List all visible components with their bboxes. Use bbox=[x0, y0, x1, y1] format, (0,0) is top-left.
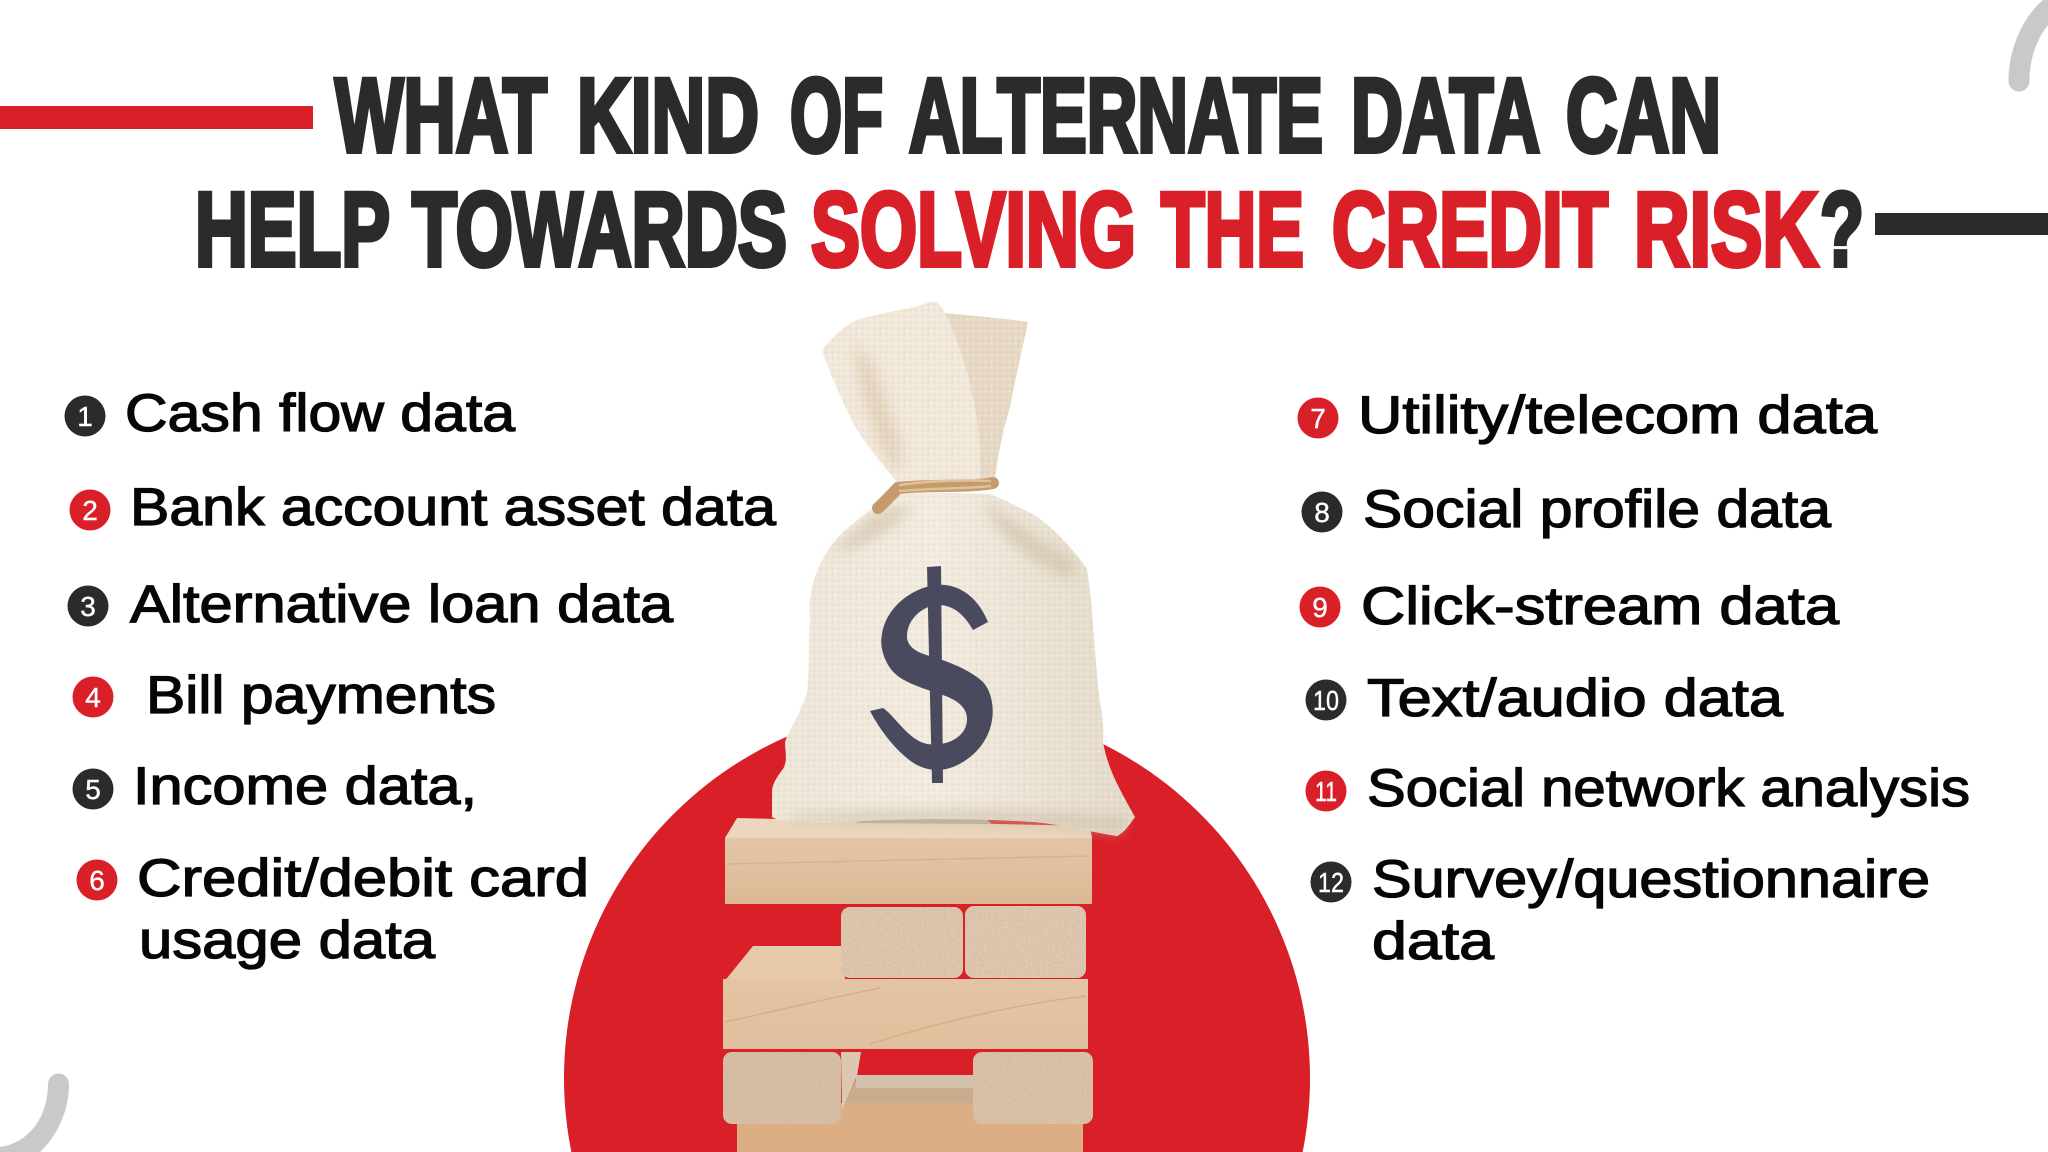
bag folds bbox=[790, 500, 1130, 834]
right list bbox=[1298, 386, 1970, 971]
title bbox=[195, 58, 1864, 288]
title line 1: KIND bbox=[577, 58, 759, 174]
title line 2: ? bbox=[1820, 172, 1864, 288]
rope tie bbox=[878, 480, 993, 508]
second row blocks bbox=[841, 906, 1086, 978]
bottom plank bbox=[737, 1075, 1083, 1152]
item 6: Credit/debit card bbox=[137, 849, 589, 908]
knot right flap bbox=[945, 313, 1028, 478]
item 10: 10 bbox=[1313, 685, 1339, 716]
title line 1 bbox=[335, 58, 1721, 174]
left list bbox=[64, 384, 777, 970]
title line 2: TOWARDS bbox=[412, 172, 787, 288]
decorative arc: top right bbox=[2008, 0, 2048, 92]
title line 1: DATA bbox=[1351, 58, 1540, 174]
title line 2: CREDIT bbox=[1332, 172, 1608, 288]
item 9: 9 bbox=[1312, 592, 1328, 623]
item 12: Survey/questionnaire bbox=[1372, 850, 1930, 909]
top plank bbox=[725, 818, 1092, 904]
item 12: data bbox=[1372, 912, 1495, 971]
title line 2: RISK bbox=[1634, 172, 1818, 288]
item 8: Social profile data bbox=[1363, 480, 1832, 539]
knot shadow bbox=[855, 345, 902, 470]
title accent bar: dark bbox=[1875, 213, 2048, 235]
item 6: usage data bbox=[139, 911, 436, 970]
title line 1: CAN bbox=[1566, 58, 1721, 174]
item 3: Alternative loan data bbox=[130, 575, 674, 634]
decorative arc: bottom left bbox=[0, 1074, 69, 1152]
item 1: 1 bbox=[77, 401, 93, 432]
illustration: wooden block tower bbox=[723, 818, 1093, 1152]
item 6 bbox=[76, 849, 589, 970]
item 11: Social network analysis bbox=[1367, 759, 1970, 818]
item 11: 11 bbox=[1315, 776, 1337, 807]
dollar sign bbox=[870, 566, 993, 783]
item 5: 5 bbox=[85, 774, 101, 805]
bag neck and knot bbox=[822, 302, 1028, 487]
third row left block bbox=[723, 1052, 861, 1124]
knot weave texture bbox=[822, 302, 1028, 487]
item 4: 4 bbox=[85, 682, 101, 713]
title line 2: THE bbox=[1161, 172, 1304, 288]
item 9: Click-stream data bbox=[1361, 577, 1840, 636]
third row right block bbox=[973, 1052, 1093, 1124]
item 2: Bank account asset data bbox=[130, 478, 777, 537]
bag weave texture bbox=[772, 491, 1135, 836]
illustration: money bag bbox=[772, 302, 1135, 836]
title line 1: ALTERNATE bbox=[909, 58, 1323, 174]
title line 2 bbox=[195, 172, 1864, 288]
item 6: 6 bbox=[89, 865, 105, 896]
title accent bar: red bbox=[0, 106, 313, 129]
item 4: Bill payments bbox=[146, 666, 496, 725]
title line 2: SOLVING bbox=[811, 172, 1136, 288]
item 5: Income data, bbox=[133, 757, 477, 816]
item 7: 7 bbox=[1310, 403, 1326, 434]
item 2: 2 bbox=[82, 495, 98, 526]
title line 1: OF bbox=[790, 58, 883, 174]
item 10: Text/audio data bbox=[1367, 669, 1784, 728]
item 8: 8 bbox=[1314, 497, 1330, 528]
title line 1: WHAT bbox=[335, 58, 547, 174]
bag body bbox=[772, 491, 1135, 836]
second plank bbox=[723, 946, 1088, 1049]
item 7: Utility/telecom data bbox=[1358, 386, 1878, 445]
item 12: 12 bbox=[1318, 867, 1344, 898]
item 12 bbox=[1310, 850, 1930, 971]
title line 2: HELP bbox=[195, 172, 390, 288]
item 3: 3 bbox=[80, 591, 96, 622]
red circle backdrop bbox=[564, 705, 1310, 1152]
item 1: Cash flow data bbox=[125, 384, 516, 443]
